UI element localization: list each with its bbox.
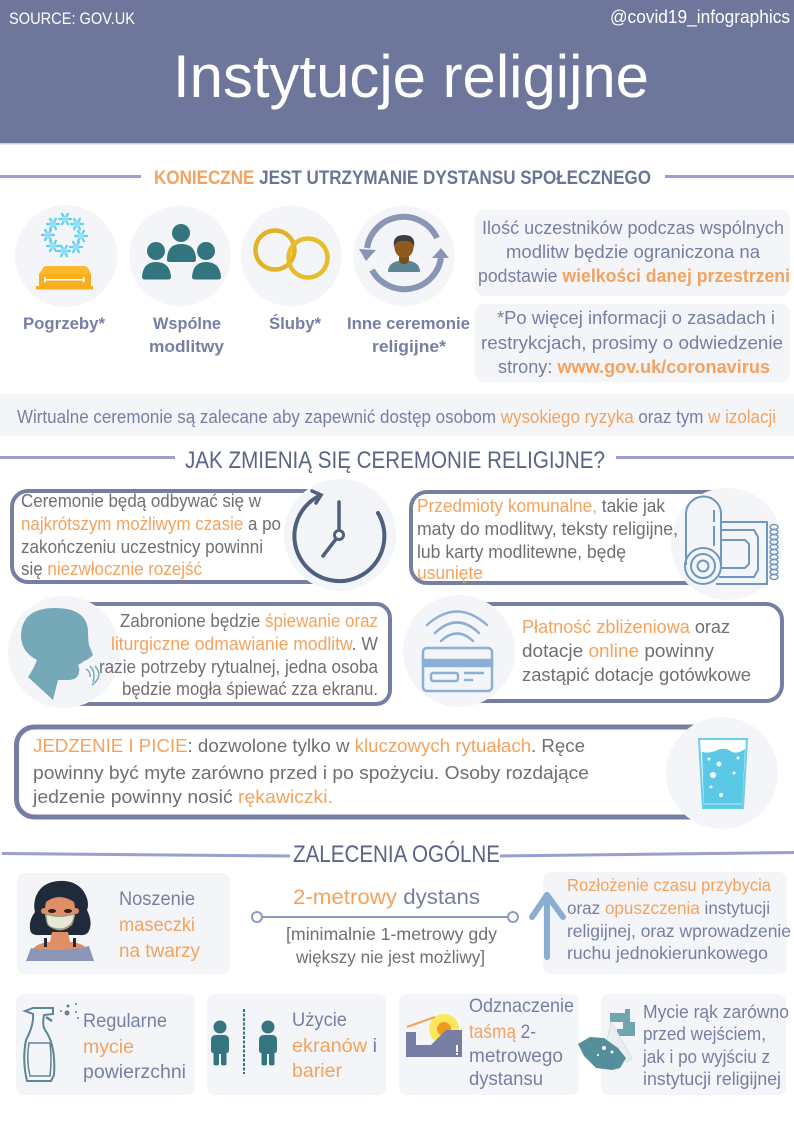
label: group prayer: Wspólne [153,314,221,333]
title: Instytucje religijne [173,43,649,110]
panel: face masks: maseczki [119,914,195,936]
icon: washing hands [578,1009,635,1070]
panel: screens and barriers: ekranów i [292,1035,377,1057]
panel: face masks: na twarzy [119,940,200,962]
panel: tape marking [399,994,579,1095]
panel: singing forbidden [8,596,390,708]
panel: food and drink: jedzenie powinny nosić rękawiczki. [32,786,333,807]
panel: singing forbidden: liturgiczne odmawianie modlitw. W [111,633,379,654]
panel: more information [475,304,790,382]
panel: singing forbidden: będzie mogła śpiewać zza ekranu. [122,678,378,699]
panel: attendance limit: podstawie wielkości danej przestrzeni [478,265,790,286]
label: group prayer [149,314,225,356]
panel: singing forbidden: Zabronione będzie śpiewanie oraz [120,610,378,631]
panel: more information: *Po więcej informacji o zasadach i [497,307,775,328]
panel: food and drink: powinny być myte zarówno przed i po spożyciu. Osoby rozdające [33,762,589,783]
panel: contactless payment: Płatność zbliżeniowa oraz [522,616,730,637]
icon: group prayer [130,206,230,306]
icon: woman with mask [26,881,94,961]
icon: spray bottle [24,1003,79,1081]
panel: staggered arrival: ruchu jednokierunkowego [567,943,768,963]
panel: hand washing: jak i po wyjściu z [642,1046,770,1067]
panel: hand washing: przed wejściem, [643,1023,766,1044]
section heading: general recommendations: ZALECENIA OGÓLNE [293,841,500,868]
section heading: how ceremonies change: JAK ZMIENIĄ SIĘ CEREMONIE RELIGIJNE? [185,447,605,474]
panel: singing forbidden: razie potrzeby rytualnej, jedna osoba [99,656,379,677]
panel: staggered arrival: religijnej, oraz wprowadzenie [567,921,791,941]
panel: tape marking: dystansu [469,1068,543,1090]
panel: surface cleaning: mycie [83,1036,134,1058]
label: other ceremonies: Inne ceremonie [347,314,470,333]
panel: staggered arrival: oraz opuszczenia instytucji [567,898,770,918]
panel: screens and barriers: barier [292,1060,343,1082]
source label: SOURCE: GOV.UK [9,9,136,28]
panel: communal objects: Przedmioty komunalne, takie jak [417,495,666,516]
panel: communal objects: usunięte [417,562,483,583]
panel: shortest time [12,479,396,591]
panel: surface cleaning: Regularne [83,1010,167,1032]
panel: face masks: Noszenie [119,888,195,910]
header banner [0,0,794,144]
handle: @covid19_infographics [610,7,790,28]
panel: surface cleaning [16,994,195,1095]
icon: clock [284,479,396,591]
panel: face masks [17,873,230,974]
panel: attendance limit: modlitw będzie ograniczona na [506,241,761,262]
panel: attendance limit: Ilość uczestników podczas wspólnych [482,217,784,238]
panel: shortest time: Ceremonie będą odbywać się w [21,490,262,511]
panel: communal objects: lub karty modlitewne, będę [417,541,626,562]
icon: wedding rings [240,206,342,306]
section heading: how ceremonies change [0,447,794,474]
icon: coffin [36,266,93,290]
panel: attendance limit [475,210,790,296]
panel: hand washing: Mycie rąk zarówno [643,1001,789,1022]
panel: hand washing: instytucji religijnej [643,1068,781,1089]
section heading: general recommendations [2,841,794,868]
panel: hand washing [578,994,789,1095]
panel: food and drink [16,717,778,829]
panel: communal objects: maty do modlitwy, teksty religijne, [417,518,678,539]
panel: contactless payment: dotacje online powinny [522,640,715,661]
panel: tape marking: taśmą 2- [469,1021,536,1043]
icon: wreath [42,214,87,256]
panel: tape marking: metrowego [469,1045,563,1067]
icon: two people with a screen [211,1009,277,1074]
2-metre distance diagram: większy nie jest możliwy] [295,947,485,967]
panel: more information: restrykcjach, prosimy o odwiedzenie [481,332,783,353]
label: group prayer: modlitwy [149,337,225,356]
panel: contactless payment [403,595,782,707]
panel: food and drink: JEDZENIE I PICIE: dozwolone tylko w kluczowych rytuałach. Ręce [33,735,585,756]
panel: staggered arrival: Rozłożenie czasu przybycia [567,875,771,895]
icon: singing head [8,596,120,708]
panel: more information: strony: www.gov.uk/coronavirus [498,356,770,377]
icon: other ceremonies [354,206,454,306]
panel: surface cleaning: powierzchni [83,1061,186,1083]
label: funerals: Pogrzeby* [23,314,105,333]
2-metre distance diagram: 2-metrowy dystans [293,885,480,909]
panel: shortest time: najkrótszym możliwym czasie a po [21,513,281,534]
panel: communal objects [411,488,783,600]
icon: prayer mat [671,488,783,600]
panel: shortest time: zakończeniu uczestnicy powinni [21,536,263,557]
panel: staggered arrival [532,872,791,974]
section heading: social distancing: KONIECZNE JEST UTRZYMANIE DYSTANSU SPOŁECZNEGO [154,168,651,189]
label: other ceremonies: religijne* [372,337,446,356]
icon: contactless card [403,595,515,707]
banner: virtual ceremonies [0,394,794,436]
panel: screens and barriers [207,994,386,1095]
label: other ceremonies [347,314,470,356]
arrow: one way [532,895,563,957]
2-metre distance diagram: [minimalnie 1-metrowy gdy [286,924,497,944]
icon: funerals [15,205,117,307]
panel: screens and barriers: Użycie [292,1009,347,1031]
panel: shortest time: się niezwłocznie rozejść [21,558,202,579]
panel: contactless payment: zastąpić dotacje gotówkowe [522,664,751,685]
banner: virtual ceremonies: Wirtualne ceremonie są zalecane aby zapewnić dostęp osobom wysokiego ryzyka oraz tym w izolacji [17,406,776,427]
section heading: social distancing [0,168,794,189]
2-metre distance diagram [252,885,518,967]
icon: glass of water [666,717,778,829]
panel: tape marking: Odznaczenie [469,995,574,1017]
label: weddings: Śluby* [269,314,321,333]
icon: tape dispenser [406,1014,462,1057]
